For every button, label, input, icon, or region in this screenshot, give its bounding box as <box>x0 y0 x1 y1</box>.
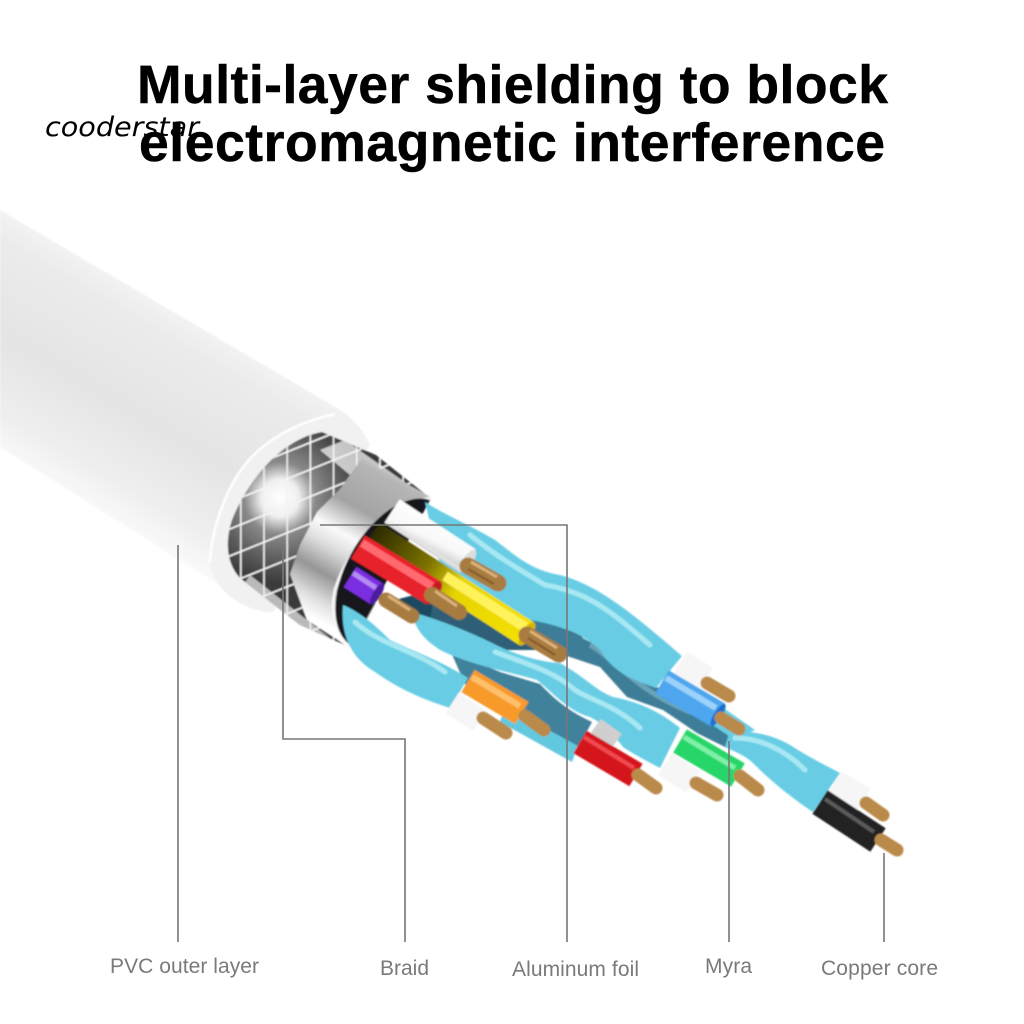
leader: Myra <box>728 741 730 942</box>
labels: Aluminum foil <box>512 958 639 981</box>
wire: purple <box>350 573 412 616</box>
lower left strand <box>343 605 468 708</box>
wire: red pair <box>580 727 656 788</box>
labels: Myra <box>705 955 752 978</box>
braid layer <box>227 431 425 645</box>
shadowed strands <box>395 560 733 762</box>
lower middle strand <box>412 612 680 768</box>
leader lines <box>178 525 884 942</box>
watermark: cooderstar <box>45 112 201 143</box>
strand highlights <box>355 535 805 770</box>
leader: Braid <box>283 550 405 942</box>
light blue shield strands <box>343 502 840 812</box>
wire: white <box>392 511 498 584</box>
cable illustration <box>0 210 897 850</box>
title: electromagnetic interference <box>139 114 885 173</box>
aluminum foil layer <box>290 458 432 650</box>
wire: blue pair <box>662 663 739 729</box>
upper strand <box>425 502 682 688</box>
title: Multi-layer shielding to block <box>137 56 888 115</box>
labels: Braid <box>380 957 429 980</box>
leader: PVC outer layer <box>177 545 179 942</box>
labels: PVC outer layer <box>110 955 259 978</box>
jacket end ring <box>210 413 370 612</box>
leader: Aluminum foil <box>320 525 567 942</box>
wire: yellow <box>372 534 559 655</box>
leader: Copper core <box>883 853 885 942</box>
wire: red <box>358 543 459 612</box>
labels <box>110 955 938 981</box>
cable interior <box>335 498 430 646</box>
wire: green pair <box>665 737 758 795</box>
title <box>137 56 888 173</box>
PVC jacket <box>0 210 368 612</box>
wire: orange pair <box>452 677 544 733</box>
wire: black pair <box>820 782 897 850</box>
labels: Copper core <box>821 957 938 980</box>
far strand <box>725 730 840 812</box>
